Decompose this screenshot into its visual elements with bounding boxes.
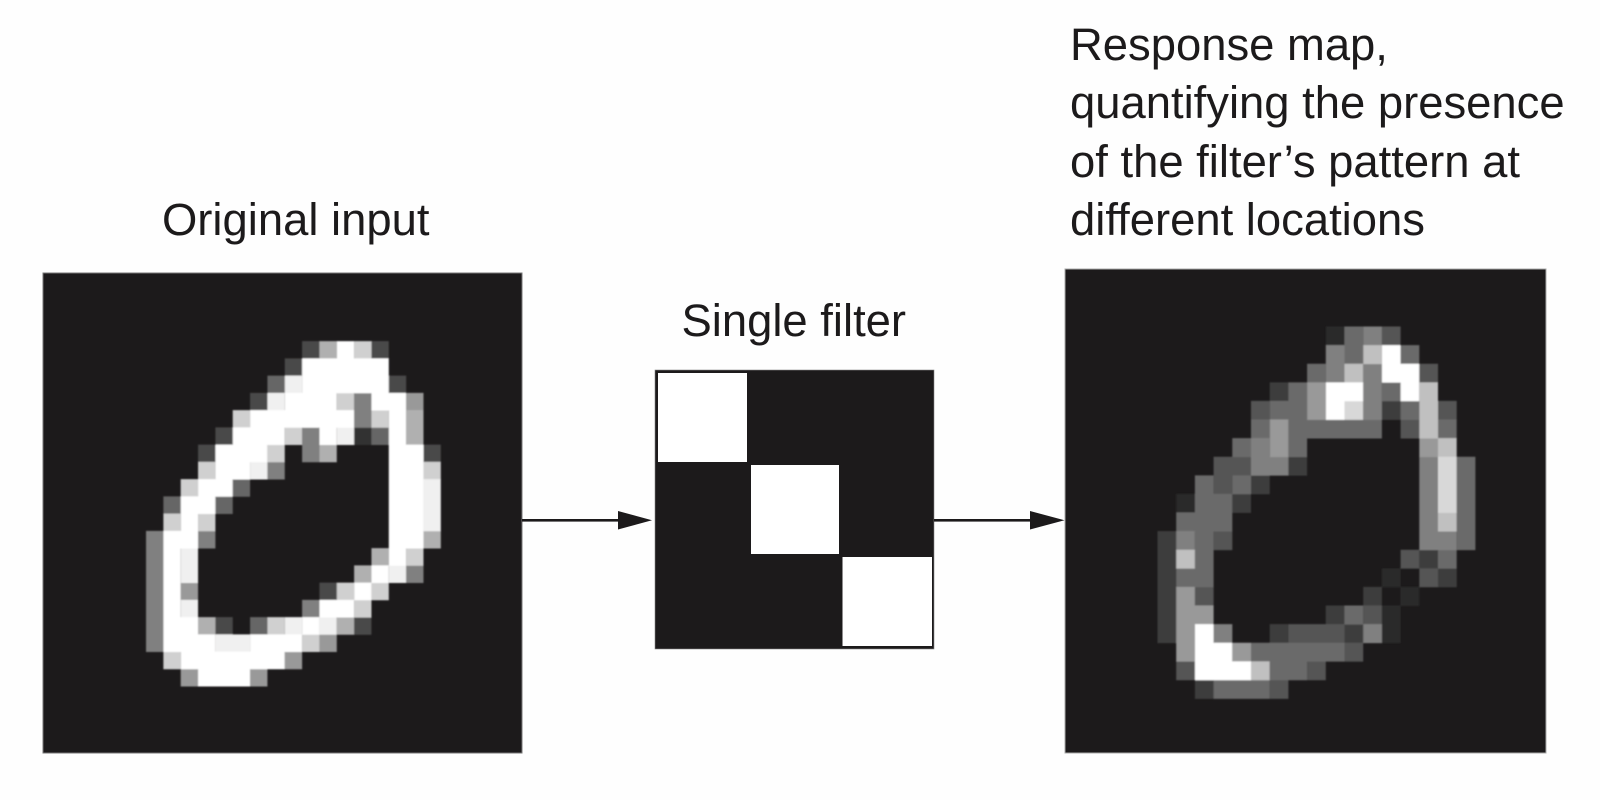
heading: response map caption (1070, 19, 1565, 245)
panel: single filter grid (655, 370, 934, 649)
filter cell top left (658, 373, 747, 462)
heading: original input: Original input (162, 194, 430, 245)
arrow: filter to response map (934, 511, 1064, 530)
filter cell bottom right (842, 557, 932, 646)
panel: response map image (1065, 269, 1546, 753)
digit zero pixel grid (146, 350, 441, 678)
response map pixel grid (1158, 336, 1475, 689)
heading: response map caption: of the filter’s pattern at (1070, 136, 1520, 187)
heading: response map caption: quantifying the presence (1070, 77, 1565, 128)
heading: single filter: Single filter (682, 295, 906, 346)
heading: response map caption: different locations (1070, 194, 1425, 245)
panel: original input image (43, 273, 522, 753)
arrow: input to filter (522, 511, 652, 530)
filter cell centre (751, 465, 839, 554)
heading: response map caption: Response map, (1070, 19, 1388, 70)
